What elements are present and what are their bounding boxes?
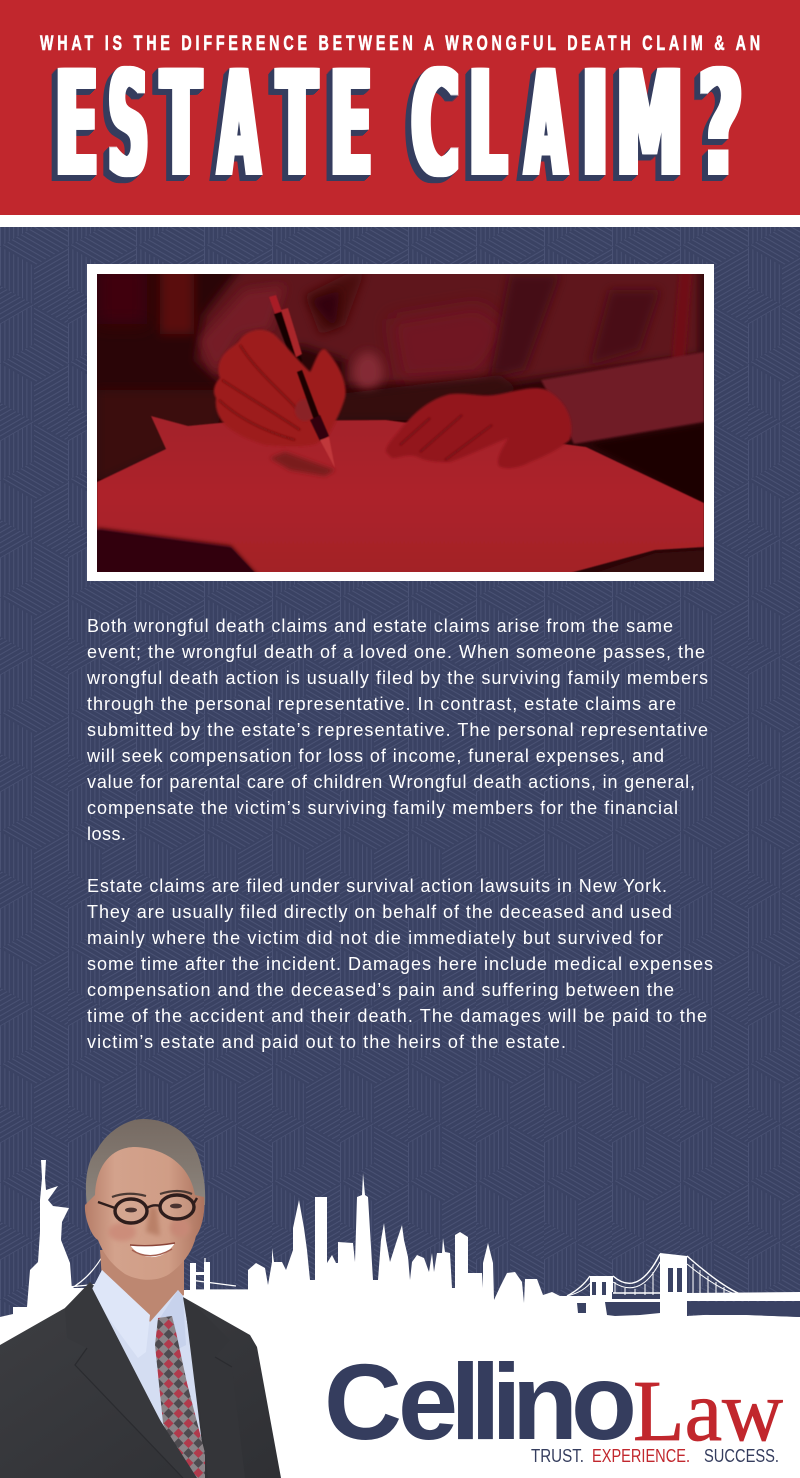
paragraph 2: compensation and the deceased’s pain and suffering between the [87, 980, 674, 1000]
paper [97, 416, 704, 573]
logo wordmark Law: Law [633, 1362, 783, 1459]
left hand [214, 330, 346, 446]
body text [86, 616, 713, 1052]
bridge cables [68, 1254, 740, 1296]
jacket lapels [65, 1284, 197, 1478]
pen tip [297, 370, 335, 468]
paragraph 2 [87, 876, 713, 1052]
main title: T [158, 39, 197, 210]
paragraph 2: Estate claims are filed under survival action lawsuits in New York. [87, 876, 667, 896]
paragraph 2: They are usually filed directly on behalf of the deceased and used [87, 902, 672, 922]
main title: A [215, 39, 256, 210]
glasses [98, 1195, 197, 1223]
main title: L [466, 39, 503, 210]
main title: I [578, 39, 606, 210]
main title: M [613, 39, 679, 210]
hair [86, 1119, 205, 1215]
right sleeve [541, 352, 704, 444]
paragraph 2: victim’s estate and paid out to the heirs of the estate. [87, 1032, 566, 1052]
bridge gaps [577, 1268, 800, 1317]
paragraph 2: mainly where the victim did not die immediately but survived for [87, 928, 663, 948]
paragraph 1: wrongful death action is usually filed by the surviving family members [86, 668, 708, 688]
main title: S [105, 39, 145, 210]
right hand [386, 388, 571, 468]
left bridge tower [68, 1262, 210, 1295]
header banner [0, 0, 800, 215]
paragraph 1: submitted by the estate’s representative. The personal representative [87, 720, 708, 740]
paragraph 1 [86, 616, 708, 844]
paragraph 1: Both wrongful death claims and estate claims arise from the same [87, 616, 673, 636]
main title: T [274, 39, 313, 210]
eyes [112, 1191, 192, 1212]
skyline [0, 1160, 800, 1478]
paragraph 1: through the personal representative. In contrast, estate claims are [87, 694, 676, 714]
main title: A [522, 39, 563, 210]
tagline [531, 1445, 779, 1466]
shirt [196, 265, 700, 385]
CellinoLaw logo [324, 1350, 783, 1466]
paragraph 2: some time after the incident. Damages here include medical expenses [87, 954, 713, 974]
dark table edge right [590, 425, 704, 505]
cheek and nose shading [108, 1205, 190, 1241]
New York skyline silhouette and white footer [0, 1160, 800, 1478]
paragraph 1: value for parental care of children Wrongful death actions, in general, [87, 772, 695, 792]
tagline: EXPERIENCE. [592, 1445, 690, 1466]
pen [268, 294, 302, 362]
tie [155, 1316, 205, 1478]
photo: hands signing a document, red duotone, white frame [87, 264, 714, 581]
face [85, 1147, 204, 1280]
main title: C [408, 39, 455, 210]
shirt [90, 1270, 205, 1478]
paragraph 2: time of the accident and their death. The damages will be paid to the [87, 1006, 707, 1026]
paragraph 1: loss. [87, 824, 126, 844]
main title: ? [695, 39, 739, 210]
suit [0, 1282, 281, 1478]
smile [130, 1243, 175, 1257]
paragraph 1: compensate the victim’s surviving family members for the financial [87, 798, 678, 818]
main title [52, 39, 742, 210]
tagline: TRUST. [531, 1445, 584, 1466]
tagline: SUCCESS. [704, 1445, 779, 1466]
main title: E [52, 39, 94, 210]
header subtitle: WHAT IS THE DIFFERENCE BETWEEN A WRONGFUL DEATH CLAIM & AN [40, 31, 760, 55]
attorney portrait [0, 1119, 281, 1478]
neck [100, 1250, 184, 1322]
paragraph 1: will seek compensation for loss of income, funeral expenses, and [86, 746, 664, 766]
paragraph 1: event; the wrongful death of a loved one. When someone passes, the [87, 642, 705, 662]
main title: E [327, 39, 368, 210]
